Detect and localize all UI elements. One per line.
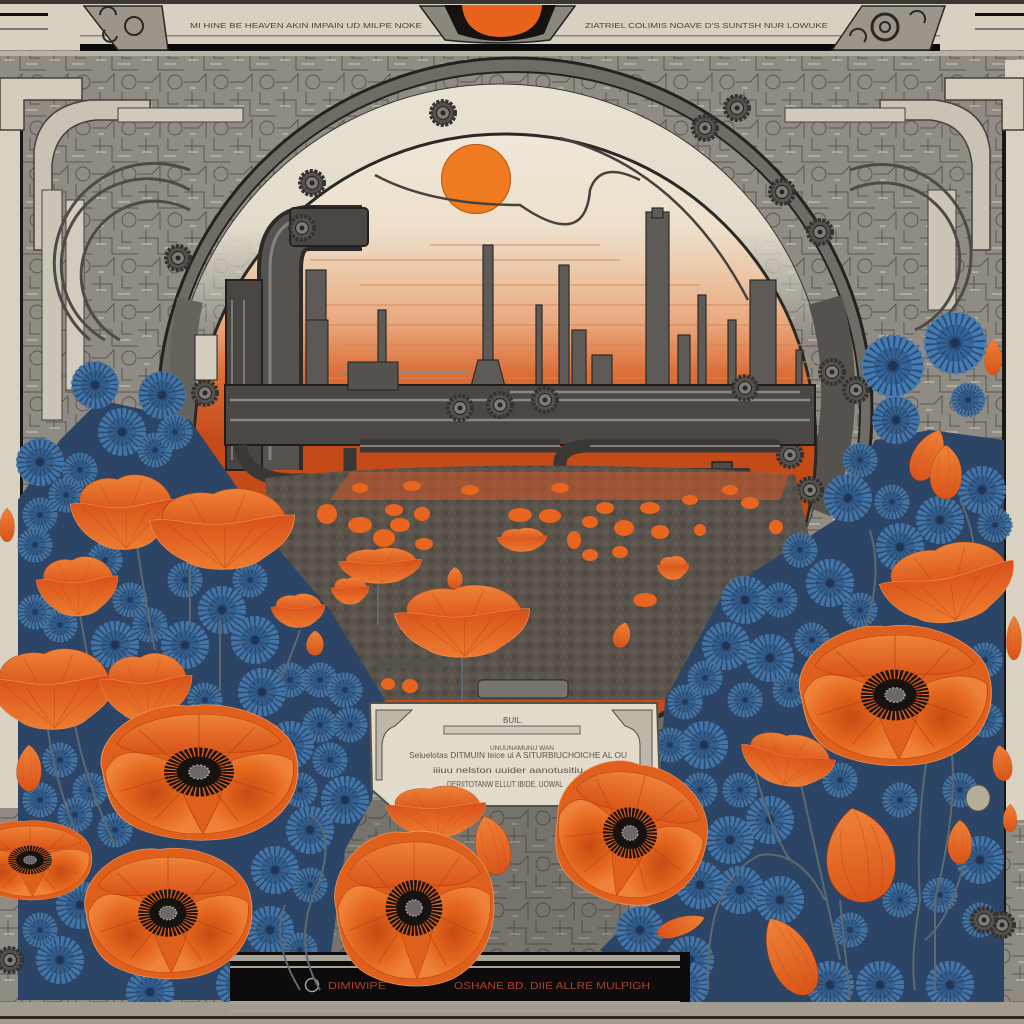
poppy stems (48, 500, 976, 1000)
header left ornament (84, 6, 168, 50)
field poppy bud (306, 630, 324, 656)
horizontal pipe works (225, 362, 815, 537)
right large poppy (875, 535, 1021, 631)
right frame column (785, 60, 1024, 930)
poppy left (36, 557, 118, 616)
large poppy top centre-left (150, 489, 294, 569)
large right front poppy (799, 625, 991, 766)
front poppy far left (0, 821, 92, 900)
seed pod (966, 785, 990, 811)
field poppy small (331, 577, 369, 604)
small twin poppy behind centre (386, 786, 516, 878)
left blue flower mass (17, 362, 385, 1015)
large poppy left centre (101, 705, 298, 840)
frame corner gear right (972, 908, 1014, 937)
right blue flower mass (600, 313, 1011, 1008)
lower right petal (751, 909, 829, 1004)
sun (442, 144, 510, 214)
arch wires (375, 138, 748, 300)
sky opening (194, 134, 816, 756)
right bud poppy (903, 424, 962, 499)
poppy side (100, 653, 192, 721)
field poppy bud upper (447, 567, 463, 589)
top header band (0, 0, 1024, 56)
plaque title: BUIL. (503, 716, 523, 725)
field poppy (338, 548, 422, 583)
central plaque (370, 703, 660, 806)
bud right (948, 820, 972, 864)
front poppy centre right (538, 746, 722, 921)
poppy far left (0, 649, 116, 729)
right top edge bud (985, 339, 1001, 375)
large poppy left top (70, 475, 178, 550)
industrial skyline towers (306, 208, 802, 400)
circular arch (158, 58, 872, 762)
small petal (654, 909, 708, 943)
bottom text left: DIMIWIPE (328, 981, 386, 992)
petal poppy right (735, 724, 839, 795)
bottom text right: OSHANE BD. DIIE ALLRE MULPIGH (454, 981, 650, 992)
poppy field (265, 466, 810, 700)
plaque text: iiiuu nelston uuider aanotusitiu (433, 765, 583, 775)
right edge bud (1006, 616, 1022, 660)
arch gears (166, 96, 868, 502)
frame corner gear left (0, 948, 22, 972)
header left text: MI HINE BE HEAVEN AKIN IMPAIN UD MILPE NOKE (190, 23, 422, 30)
right cup poppy (818, 802, 902, 908)
field poppy right (657, 556, 689, 580)
header right text: ZIATRIEL COLIMIS NOAVE D'S SUNTSH NUR LOWUKE (585, 23, 828, 30)
bud far right (989, 744, 1015, 782)
centre poppy (394, 585, 530, 657)
plaque text: DERIITOTANW ELLUT IBIDE, UOWAL (447, 779, 563, 789)
bottom copyright mark (306, 978, 318, 992)
field poppy small (271, 594, 325, 628)
bud left lower (17, 745, 41, 791)
field poppy upper (497, 528, 547, 552)
plaque text: UNUUNAMUNU WAN (490, 745, 554, 752)
header central orange medallion (420, 5, 575, 43)
plaque text: Seiuelotas DITMUIN teice ui A SITURBIUCHOICHE AL OU (409, 750, 627, 760)
poppy edge bud (0, 508, 15, 542)
grey machinery below plaque (300, 800, 630, 970)
front poppy centre bottom (335, 831, 494, 986)
plaque text (409, 745, 627, 789)
bud right edge low (1003, 804, 1017, 832)
header right ornament (832, 6, 945, 50)
left L-shaped machine (195, 171, 368, 470)
left frame column (0, 78, 243, 878)
field poppy bud centre (611, 620, 633, 650)
front poppy bottom left (85, 848, 252, 979)
bottom frame bar (0, 952, 1024, 1024)
